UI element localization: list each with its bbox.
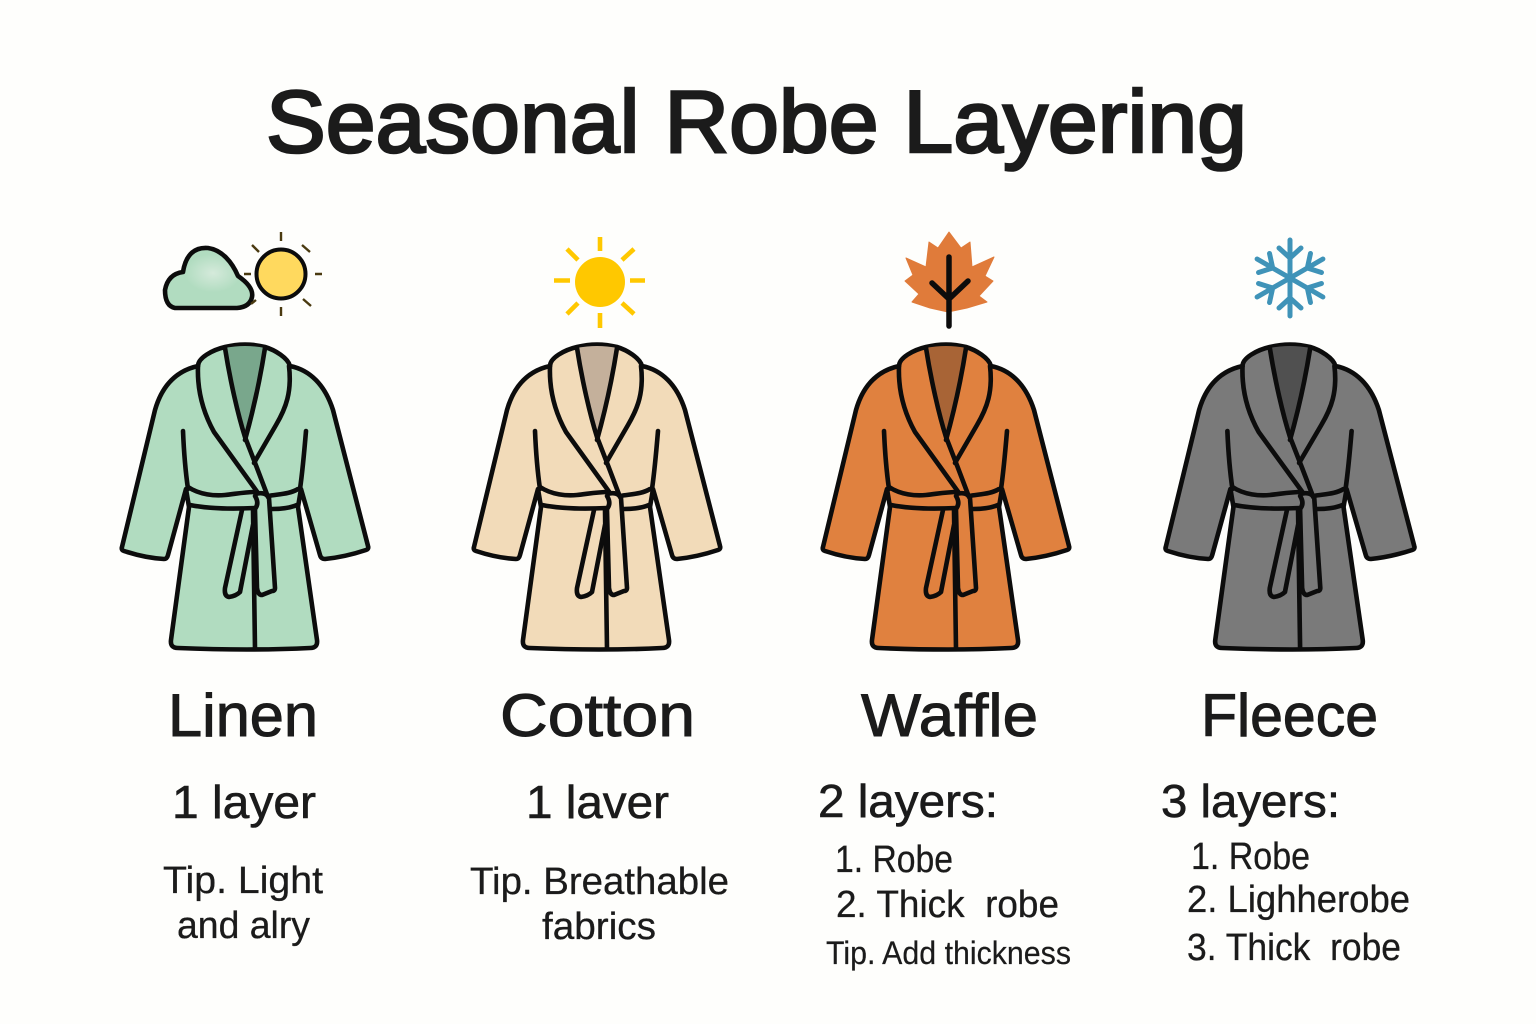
layer count: cotton: 1 laver	[526, 776, 669, 828]
heading: Linen: Linen	[168, 682, 318, 749]
icon: autumn leaf	[905, 232, 994, 326]
layer list: fleece: 3. Thick robe	[1187, 927, 1401, 969]
layer list: fleece: 1. Robe	[1191, 836, 1310, 878]
tip: cotton	[470, 861, 729, 948]
layer list: fleece: 2. Lighherobe	[1187, 879, 1410, 921]
layer count: fleece: 3 layers:	[1161, 775, 1340, 827]
title: Seasonal Robe Layering	[266, 72, 1247, 171]
tip: linen: Tip. Light	[163, 860, 323, 902]
layer count: waffle: 2 layers:	[818, 775, 998, 827]
robe: waffle	[823, 344, 1069, 650]
tip: waffle: Tip. Add thickness	[826, 935, 1071, 971]
panel: waffle column	[818, 232, 1071, 971]
heading: Cotton: Cotton	[500, 682, 695, 749]
panel: cotton column	[470, 237, 729, 948]
robe: fleece	[1166, 344, 1414, 650]
heading: Waffle: Waffle	[861, 682, 1038, 749]
layer list: waffle	[835, 839, 1059, 926]
layer list: waffle: 1. Robe	[835, 839, 953, 881]
tip: cotton: Tip. Breathable	[470, 861, 729, 903]
robe: cotton	[474, 344, 720, 650]
tip: linen	[163, 860, 323, 947]
tip: cotton: fabrics	[542, 906, 656, 948]
icon: sun	[554, 237, 645, 328]
panel: linen column	[122, 232, 368, 947]
layer list: waffle: 2. Thick robe	[836, 884, 1059, 926]
panel: fleece column	[1161, 240, 1414, 969]
layer list: fleece	[1187, 836, 1410, 969]
layer count: linen: 1 layer	[172, 776, 316, 828]
heading: Fleece: Fleece	[1201, 682, 1378, 749]
icon: cloud and sun	[165, 232, 322, 316]
tip: linen: and alry	[177, 905, 310, 947]
robe: linen	[122, 344, 368, 650]
icon: snowflake	[1252, 240, 1328, 316]
